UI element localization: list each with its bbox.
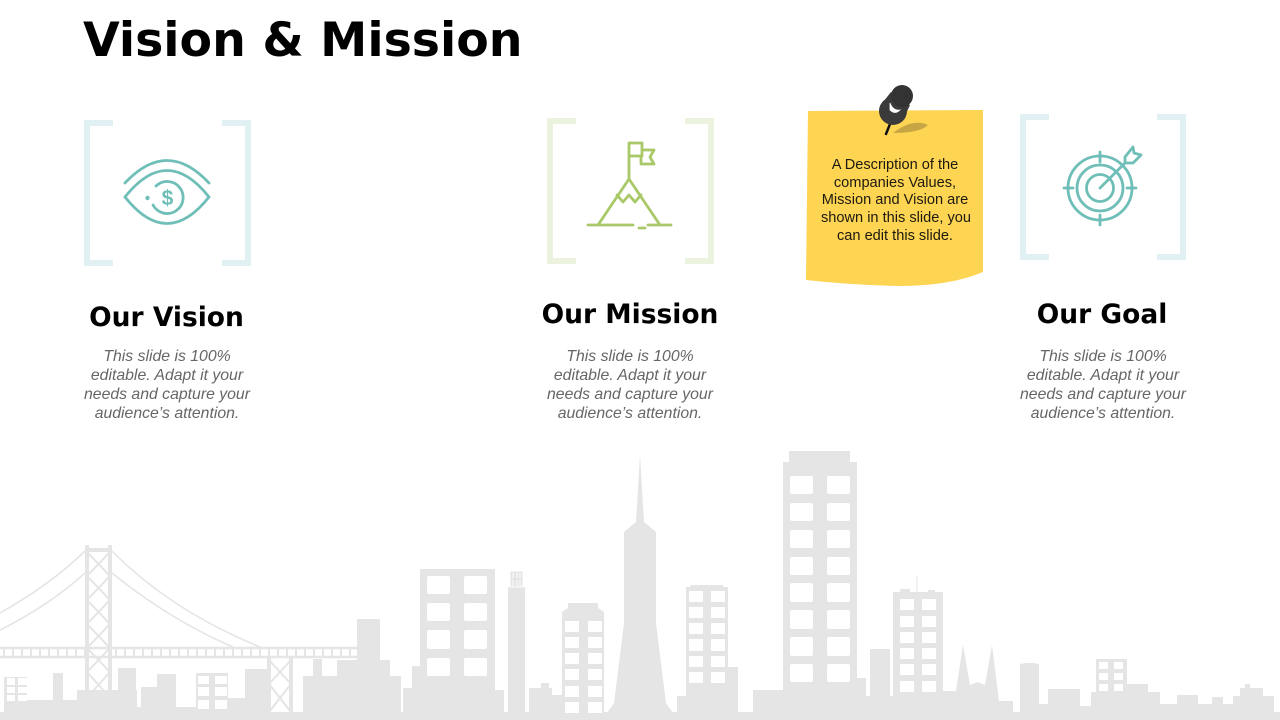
buildings bbox=[0, 451, 1280, 720]
text: goal description: editable. Adapt it your bbox=[1027, 367, 1180, 384]
clock tower top bbox=[510, 571, 523, 587]
text: mission description: needs and capture your bbox=[547, 386, 714, 403]
text: note description: Mission and Vision are bbox=[822, 192, 968, 208]
icon: target with arrow bbox=[1064, 147, 1141, 225]
text: vision description: needs and capture your bbox=[84, 386, 251, 403]
panel: our mission bbox=[542, 121, 718, 422]
heading: our mission: Our Mission bbox=[542, 299, 718, 330]
note paper bbox=[806, 110, 983, 286]
text: goal description: This slide is 100% bbox=[1039, 348, 1167, 365]
text: mission description: audience’s attention. bbox=[558, 405, 702, 422]
text: note description: shown in this slide, you bbox=[821, 210, 971, 226]
text: vision description: editable. Adapt it your bbox=[91, 367, 244, 384]
icon: eye with dollar bbox=[125, 160, 209, 224]
panel: our vision bbox=[84, 123, 251, 422]
icon: eye with dollar: $ bbox=[162, 187, 174, 210]
text: note description: A Description of the bbox=[832, 157, 958, 173]
icon: push pin bbox=[879, 85, 928, 134]
text: mission description: This slide is 100% bbox=[566, 348, 694, 365]
heading: our goal: Our Goal bbox=[1037, 299, 1167, 330]
title: Vision & Mission bbox=[83, 13, 523, 68]
text: note description: can edit this slide. bbox=[837, 228, 953, 244]
heading: our vision: Our Vision bbox=[89, 302, 244, 333]
icon frame: goal brackets bbox=[1023, 117, 1183, 257]
panel: our goal bbox=[1020, 117, 1187, 422]
building windows bbox=[7, 476, 1123, 713]
text: goal description: needs and capture your bbox=[1020, 386, 1187, 403]
text: goal description: audience’s attention. bbox=[1031, 405, 1175, 422]
city skyline background bbox=[0, 451, 1280, 720]
bridge bbox=[0, 545, 357, 712]
text: mission description: editable. Adapt it your bbox=[554, 367, 707, 384]
icon frame: vision brackets bbox=[87, 123, 248, 263]
sticky note callout bbox=[806, 85, 983, 286]
text: note description: companies Values, bbox=[834, 175, 956, 191]
text: vision description: audience’s attention. bbox=[95, 405, 239, 422]
icon: mountain with flag bbox=[588, 143, 671, 228]
text: vision description: This slide is 100% bbox=[103, 348, 231, 365]
icon frame: mission brackets bbox=[550, 121, 711, 261]
